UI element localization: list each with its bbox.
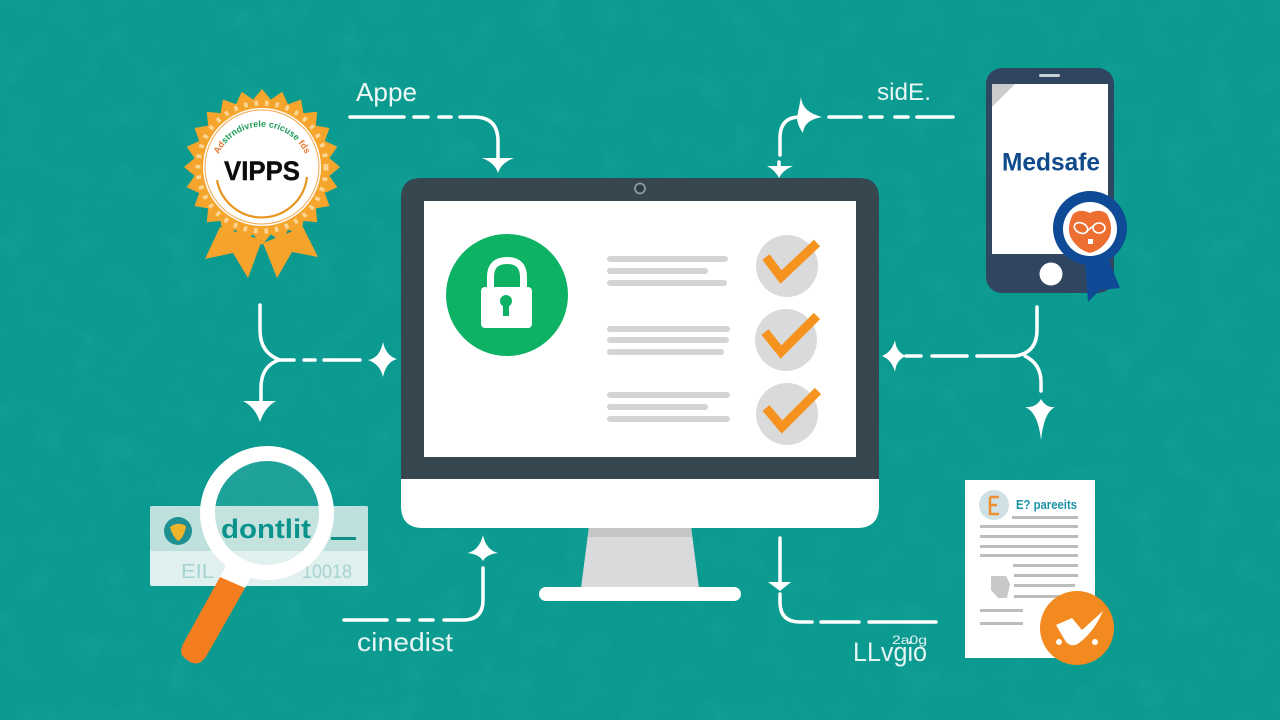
magnifier ring: [208, 454, 326, 572]
phone body: [986, 68, 1114, 293]
check mark 1: [756, 235, 818, 297]
webcam: [635, 184, 645, 194]
Medsafe label: Medsafe: [1002, 148, 1100, 176]
label: side: sidE.: [877, 79, 931, 106]
magnified word: dontlit: [221, 514, 311, 544]
orange check seal: [1040, 591, 1114, 665]
monitor screen: [424, 201, 856, 457]
label: LLvgio: 2a0g: [892, 633, 927, 647]
screen corner fold: [992, 84, 1015, 107]
starburst seal: [184, 89, 340, 245]
arrow: bottom left to monitor: [344, 535, 498, 620]
monitor stand: [539, 526, 741, 601]
smile arc: [217, 177, 307, 217]
phone screen: [992, 84, 1108, 254]
magnifier handle: [181, 577, 245, 663]
document logo: [979, 490, 1009, 520]
phone with Medsafe logo: [986, 68, 1127, 302]
label: LLvgio: LLvgio: [853, 637, 927, 667]
text lines: row 2: [607, 326, 730, 355]
arrow: top right to monitor: [767, 97, 953, 178]
monitor chin: [401, 470, 879, 528]
document title: E? pareeits: [1016, 498, 1077, 512]
arrow: top left to monitor: [350, 117, 514, 173]
monitor bezel: [401, 178, 879, 479]
magnifier: [181, 454, 326, 663]
central monitor: [401, 178, 879, 601]
faded card text right: 10018: [302, 562, 352, 583]
ribbon tails: [205, 227, 318, 278]
text lines: row 1: [607, 256, 728, 286]
arrow: middle left split: [243, 305, 397, 422]
document with orange check: [965, 480, 1114, 665]
label: Appe: Appe: [356, 77, 417, 107]
paper sheet: [965, 480, 1095, 658]
underline cursor: [331, 537, 356, 540]
search card: [150, 506, 368, 586]
check mark 2: [755, 309, 817, 371]
check mark 3: [756, 383, 818, 445]
icon: padlock: [446, 234, 568, 356]
search result card with magnifier: [150, 454, 368, 663]
document text lines: [980, 516, 1078, 625]
card icon: [164, 517, 192, 545]
blue rosette: [1053, 191, 1127, 302]
magnifier neck: [220, 565, 252, 588]
arrow: middle right split: [882, 307, 1055, 440]
magnifier glass tint: [215, 461, 319, 565]
label: cinedist: cinedist: [357, 627, 454, 657]
faded card text left: EIL: [181, 561, 214, 583]
VIPPS badge: [184, 89, 340, 278]
curved small caption: Adstrndivrele cricuse fds: [214, 120, 309, 154]
seal face: [203, 108, 321, 226]
home button: [1040, 262, 1062, 286]
badge name: VIPPS: [224, 156, 300, 186]
document map thumbnail: [991, 576, 1010, 598]
text lines: row 3: [607, 392, 730, 422]
phone speaker: [1039, 74, 1060, 77]
arrow: bottom right from monitor: [768, 538, 936, 622]
